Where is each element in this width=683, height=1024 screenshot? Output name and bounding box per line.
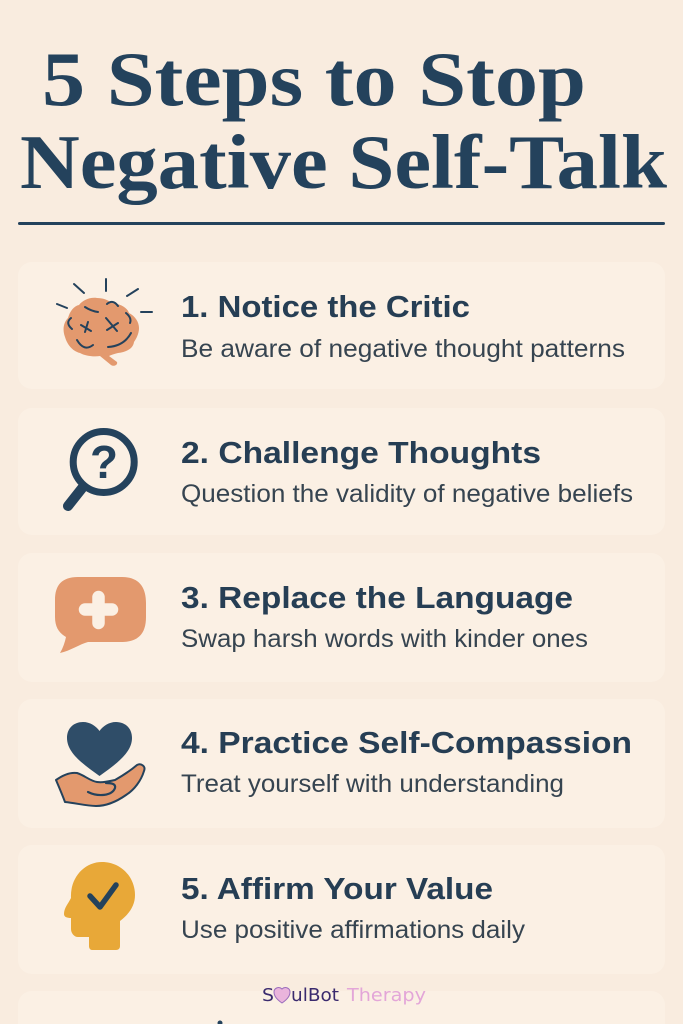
logo: SoulBot Therapy: ulBot — [291, 985, 339, 1006]
icon: magnifying glass with question mark: ? — [90, 436, 118, 488]
title — [20, 36, 667, 205]
description: step 1: Be aware of negative thought patterns — [181, 335, 625, 363]
panel: step 5 — [18, 845, 665, 974]
panel: step 1 — [18, 262, 665, 389]
icon: speech bubble with plus — [55, 577, 146, 653]
title: 5 Steps to Stop — [42, 36, 586, 122]
logo: SoulBot Therapy: Therapy — [346, 985, 426, 1006]
description: step 2: Question the validity of negative beliefs — [181, 480, 633, 508]
logo: SoulBot Therapy: S — [262, 985, 274, 1006]
heading: step 4: 4. Practice Self-Compassion — [181, 725, 632, 760]
panel: step 3 — [18, 553, 665, 682]
panel: step 2 — [18, 408, 665, 535]
description: step 5: Use positive affirmations daily — [181, 916, 526, 944]
title: Negative Self-Talk — [20, 119, 667, 205]
icon: brain with sparks — [57, 279, 152, 366]
heading: step 5: 5. Affirm Your Value — [181, 871, 493, 906]
logo: SoulBot Therapy — [262, 985, 426, 1006]
panel: cropped next card — [18, 991, 665, 1024]
description: step 3: Swap harsh words with kinder ones — [181, 625, 588, 653]
heading: step 2: 2. Challenge Thoughts — [181, 435, 541, 470]
icon: heart in hand — [56, 722, 144, 806]
heading: step 1: 1. Notice the Critic — [181, 289, 470, 324]
heading: step 3: 3. Replace the Language — [181, 580, 573, 615]
panel: step 4 — [18, 699, 665, 828]
icon: head with check mark — [64, 862, 135, 950]
icon: magnifying glass with question mark — [68, 432, 134, 506]
description: step 4: Treat yourself with understanding — [181, 770, 564, 798]
